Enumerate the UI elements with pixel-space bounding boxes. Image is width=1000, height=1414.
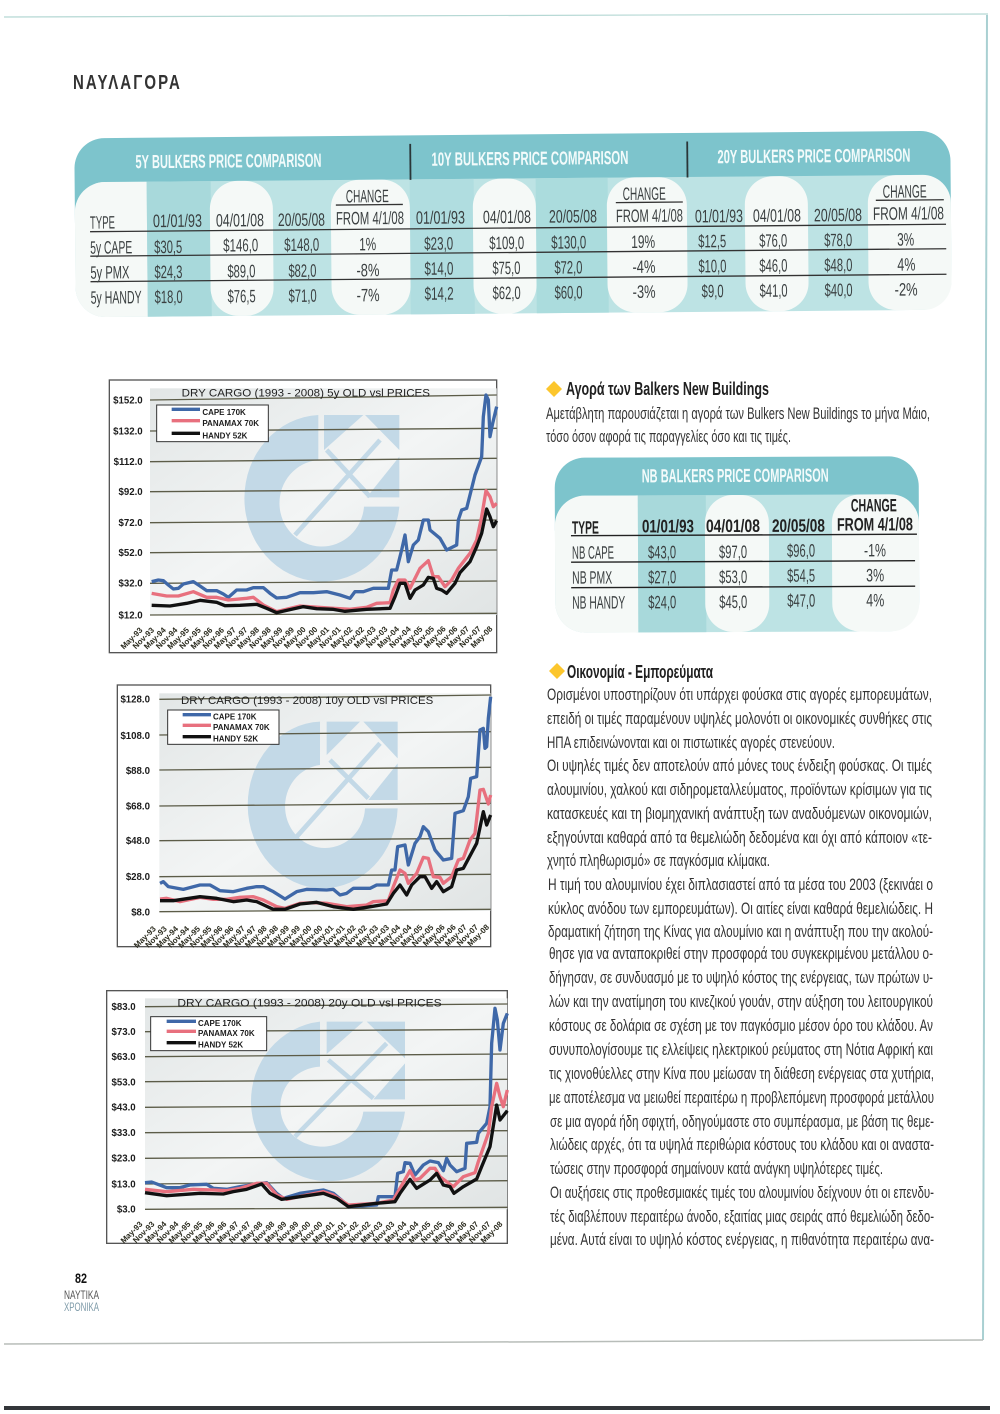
x axis labels: Nov-93	[131, 1219, 157, 1245]
x axis labels: Nov-98	[255, 923, 280, 949]
x axis labels: May-98	[243, 924, 269, 950]
table row 5y PMX: -8%	[356, 260, 379, 280]
table row 5y CAPE: $30,5	[154, 237, 182, 257]
gridlines	[150, 395, 497, 615]
table row 5y PMX: $75,0	[492, 258, 520, 278]
y axis labels: $132.0	[113, 426, 143, 437]
x axis labels: Nov-06	[434, 624, 460, 650]
x axis labels: May-00	[288, 923, 314, 949]
table rule lines	[90, 200, 946, 282]
legend: PANAMAX 70K	[213, 723, 270, 732]
NB table row pmx: $27,0	[648, 567, 676, 587]
x axis labels: May-06	[421, 922, 447, 948]
y axis labels: $108.0	[120, 731, 150, 742]
y axis labels: $12.0	[118, 610, 143, 621]
series: panamax	[145, 1083, 507, 1205]
gridlines	[159, 695, 491, 912]
x axis labels: May-97	[221, 924, 247, 950]
table column headings: 04/01/08	[483, 207, 531, 227]
x axis labels: Nov-03	[366, 923, 391, 948]
legend: PANAMAX 70K	[198, 1029, 255, 1038]
x axis labels: Nov-01	[322, 923, 347, 949]
heading: economy and commodities: Οικονομία - Εμπορεύματα	[567, 662, 713, 682]
y axis labels: $68.0	[126, 801, 150, 812]
y axis labels: $13.0	[111, 1179, 136, 1190]
footer: page number and magazine name	[64, 1270, 99, 1314]
x axis labels: Nov-07	[458, 624, 483, 650]
header titles and dividers: 5Y BULKERS PRICE COMPARISON	[135, 151, 322, 173]
x axis labels: May-03	[355, 923, 380, 949]
y axis labels: $8.0	[131, 907, 150, 918]
NB table row pmx: $54,5	[787, 566, 815, 586]
x axis labels: May-00	[282, 625, 308, 651]
NB table row pmx	[572, 565, 884, 588]
table row 5y PMX: $24,3	[154, 262, 183, 282]
y axis labels: $43.0	[111, 1103, 136, 1114]
watermark logo	[248, 722, 398, 888]
x axis labels: May-99	[266, 923, 291, 949]
table column headings: 04/01/08	[216, 210, 264, 231]
series: panamax	[160, 789, 491, 908]
table row 5y CAPE: 19%	[631, 232, 655, 252]
header titles and dividers	[135, 140, 911, 182]
y axis labels: $63.0	[111, 1052, 136, 1063]
y axis labels: $73.0	[111, 1027, 136, 1038]
NB table row handy	[572, 590, 884, 613]
x axis labels: May-94	[155, 924, 180, 950]
x axis labels: May-05	[399, 624, 425, 650]
NB table row cape: $97,0	[719, 542, 747, 562]
series: panamax	[152, 491, 497, 612]
NB table row pmx: NB PMX	[572, 568, 612, 588]
NB table title: NB BALKERS PRICE COMPARISON	[642, 466, 829, 487]
table column headings: 04/01/08	[753, 205, 801, 226]
x axis labels: Nov-94	[155, 1219, 181, 1245]
table row 5y HANDY: 5y HANDY	[91, 287, 142, 308]
NB table column headings: 01/01/93	[642, 516, 694, 536]
NB table body background	[555, 494, 919, 633]
x axis labels: Nov-99	[277, 923, 302, 949]
x axis labels: Nov-07	[455, 922, 480, 948]
legend: HANDY 52K	[213, 734, 258, 743]
NB table row cape: NB CAPE	[572, 543, 614, 563]
y axis labels: $48.0	[126, 836, 150, 847]
table column headings: 20/05/08	[549, 206, 597, 227]
legend: CAPE 170K	[198, 1019, 242, 1028]
x axis labels: May-96	[191, 1219, 217, 1245]
x axis labels: May-02	[335, 1219, 361, 1245]
x axis labels: May-08	[469, 624, 495, 650]
table column headings: CHANGE	[883, 181, 927, 202]
x axis labels: Nov-96	[210, 924, 236, 949]
series: cape	[152, 395, 497, 598]
legend	[168, 710, 279, 744]
x axis labels: Nov-95	[188, 924, 214, 950]
x axis labels: May-08	[466, 922, 491, 948]
table column headings: 01/01/93	[153, 211, 202, 231]
section title: ΝΑΥΛΑΓΟΡΑ	[73, 71, 182, 94]
table row 5y HANDY: $71,0	[289, 286, 317, 306]
x axis labels: Nov-95	[178, 625, 203, 651]
table row 5y HANDY: -3%	[633, 282, 656, 302]
x axis labels	[132, 922, 491, 950]
y axis labels: $33.0	[111, 1128, 136, 1139]
x axis labels: Nov-04	[388, 624, 413, 650]
table row 5y PMX: $10,0	[698, 256, 726, 276]
legend	[157, 405, 268, 442]
NB table rule lines	[571, 534, 917, 588]
legend: PANAMAX 70K	[202, 419, 259, 428]
heading: new buildings market: Αγορά των Balkers New Buildings	[566, 379, 769, 399]
table column headings: 20/05/08	[814, 205, 862, 225]
x axis labels: Nov-97	[224, 625, 250, 651]
NB table column headings: FROM 4/1/08	[837, 514, 913, 535]
table row 5y HANDY: $14,2	[425, 284, 454, 304]
table row 5y PMX: -4%	[632, 257, 655, 277]
chart title: DRY CARGO (1993 - 2008) 10y OLD vsl PRICES	[181, 695, 434, 707]
header titles and dividers: 10Y BULKERS PRICE COMPARISON	[431, 148, 629, 171]
table body background	[75, 175, 952, 317]
x axis labels: May-98	[236, 625, 261, 651]
x axis labels: Nov-04	[388, 923, 414, 948]
x axis labels: Nov-05	[419, 1219, 445, 1245]
x axis labels: May-94	[143, 1219, 169, 1245]
x axis labels: Nov-97	[233, 924, 258, 949]
x axis labels: May-07	[443, 922, 469, 948]
table column headings	[90, 181, 944, 233]
table column headings: CHANGE	[623, 184, 666, 204]
table row 5y PMX: $72,0	[554, 257, 582, 278]
y axis labels: $152.0	[113, 395, 143, 406]
table row 5y PMX	[90, 254, 915, 283]
x axis labels: Nov-06	[443, 1219, 469, 1245]
table column headings: TYPE	[90, 212, 115, 233]
y axis labels: $3.0	[117, 1205, 136, 1216]
table row 5y HANDY: $40,0	[825, 280, 853, 300]
table row 5y HANDY: -2%	[895, 279, 918, 300]
table row 5y HANDY: -7%	[357, 285, 380, 305]
x axis labels: May-97	[215, 1219, 241, 1245]
y axis labels: $112.0	[114, 457, 143, 468]
table row 5y CAPE: $23,0	[424, 234, 453, 254]
x axis labels: May-01	[310, 923, 336, 949]
gridlines	[145, 1004, 507, 1209]
y axis labels: $92.0	[118, 487, 143, 498]
NB table column headings: 20/05/08	[772, 516, 825, 536]
table row 5y HANDY: $9,0	[702, 281, 724, 301]
table row 5y HANDY: $41,0	[760, 281, 788, 301]
NB table row handy: $47,0	[787, 591, 815, 611]
table column headings: 01/01/93	[416, 207, 465, 228]
y axis labels: $88.0	[126, 766, 150, 777]
text block: economy and commodities	[547, 685, 934, 1249]
text block: new buildings market	[546, 404, 930, 446]
x axis labels: May-02	[332, 923, 358, 949]
x axis labels: Nov-00	[299, 1219, 325, 1245]
x axis labels: Nov-98	[248, 625, 273, 651]
NB table row cape	[572, 540, 886, 563]
x axis labels: Nov-02	[344, 923, 369, 949]
x axis labels: Nov-05	[410, 923, 436, 948]
x axis labels: May-08	[479, 1219, 505, 1245]
x axis labels: May-93	[132, 924, 158, 950]
y axis labels: $72.0	[118, 518, 143, 529]
table column headings: 20/05/08	[278, 210, 325, 230]
chart: dry cargo 10y old prices	[117, 685, 491, 950]
table row 5y HANDY: $60,0	[555, 282, 583, 303]
y axis labels: $128.0	[120, 695, 150, 706]
y axis labels: $52.0	[118, 548, 143, 559]
x axis labels: Nov-96	[203, 1219, 229, 1245]
x axis labels: May-96	[199, 924, 225, 950]
table row 5y PMX: $46,0	[759, 256, 787, 276]
x axis labels: Nov-02	[347, 1219, 373, 1245]
y axis labels: $32.0	[118, 579, 143, 590]
x axis labels: Nov-02	[341, 625, 366, 650]
table row 5y CAPE: 3%	[897, 230, 914, 250]
x axis labels: Nov-95	[179, 1219, 205, 1245]
y axis labels: $28.0	[126, 872, 150, 883]
NB table row pmx: $53,0	[719, 567, 747, 587]
x axis labels: Nov-00	[299, 923, 325, 949]
table row 5y CAPE: $148,0	[284, 235, 319, 255]
NB table row handy: $24,0	[648, 592, 676, 612]
x axis labels: Nov-07	[467, 1219, 493, 1245]
x axis labels: May-02	[329, 625, 355, 651]
NB table row pmx: 3%	[866, 565, 884, 585]
table row 5y HANDY: $76,5	[228, 286, 256, 306]
x axis labels: May-07	[455, 1219, 481, 1245]
legend: HANDY 52K	[202, 431, 248, 440]
x axis labels: Nov-96	[201, 625, 226, 651]
x axis labels: May-03	[359, 1219, 385, 1245]
NB table column headings: 04/01/08	[706, 516, 760, 536]
series: cape	[160, 697, 491, 899]
x axis labels: Nov-93	[144, 924, 169, 950]
table row 5y HANDY	[91, 279, 918, 308]
y axis labels	[113, 395, 143, 621]
x axis labels: Nov-06	[433, 922, 458, 948]
table column headings: 01/01/93	[695, 206, 743, 226]
legend: CAPE 170K	[213, 712, 257, 721]
table row 5y CAPE: 5y CAPE	[90, 237, 132, 258]
chart: dry cargo 20y old prices	[107, 991, 507, 1245]
table row 5y CAPE: $12,5	[698, 231, 726, 251]
watermark logo	[244, 415, 399, 582]
x axis labels	[119, 1219, 505, 1245]
table row 5y CAPE	[90, 230, 914, 258]
NB table row handy: 4%	[866, 590, 884, 610]
panel: bulkers price comparison table	[74, 131, 952, 317]
x axis labels: May-04	[376, 624, 401, 650]
chart title: DRY CARGO (1993 - 2008) 5y OLD vsl PRICES	[182, 388, 430, 400]
NB table column headings	[572, 495, 913, 538]
table header band	[74, 131, 951, 224]
y axis labels	[111, 1002, 136, 1216]
x axis labels: Nov-03	[371, 1219, 397, 1245]
x axis labels: Nov-03	[364, 624, 390, 650]
x axis labels: May-95	[167, 1219, 193, 1245]
legend: HANDY 52K	[198, 1041, 243, 1050]
x axis labels: Nov-97	[227, 1219, 253, 1245]
table row 5y CAPE: $146,0	[223, 235, 258, 256]
x axis labels: May-98	[239, 1219, 265, 1245]
NB table column headings: TYPE	[572, 518, 599, 538]
x axis labels: May-06	[431, 1219, 457, 1245]
NB table header band	[555, 456, 919, 531]
x axis labels: May-03	[352, 624, 378, 650]
series: cape	[145, 1008, 507, 1207]
text block: economy and commodities: χνητό πληθωρισμό» σε παγκόσμια κλίμακα.	[547, 851, 770, 870]
NB table row handy: NB HANDY	[572, 592, 625, 613]
table row 5y PMX: $89,0	[227, 261, 255, 281]
x axis labels: May-94	[142, 625, 168, 651]
table column headings: CHANGE	[346, 186, 389, 206]
x axis labels: May-99	[259, 625, 285, 651]
chart title: DRY CARGO (1993 - 2008) 20y OLD vsl PRICES	[177, 998, 442, 1010]
x axis labels: May-97	[212, 625, 238, 651]
series: handy	[160, 812, 491, 909]
x axis labels: May-01	[311, 1219, 337, 1245]
x axis labels: May-06	[422, 624, 448, 650]
text block: economy and commodities: ΗΠΑ επιδεινώνονται και οι πιστωτικές αγορές στενεύουν.	[547, 733, 835, 752]
watermark logo	[251, 1022, 405, 1181]
footer: page number and magazine name: ΧΡΟΝΙΚΑ	[64, 1300, 99, 1314]
x axis labels: Nov-98	[251, 1219, 277, 1245]
x axis labels: May-05	[407, 1219, 433, 1245]
legend	[151, 1017, 267, 1051]
icon: yellow diamond, new buildings heading	[546, 381, 562, 397]
table column headings: FROM 4/1/08	[616, 206, 683, 226]
icon: yellow diamond, economy heading	[549, 663, 565, 679]
table row 5y HANDY: $62,0	[493, 283, 521, 303]
series: handy	[152, 509, 497, 613]
table row 5y PMX: $48,0	[824, 255, 852, 275]
table row 5y CAPE: $109,0	[489, 233, 524, 253]
y axis labels: $23.0	[111, 1154, 136, 1165]
x axis labels: May-05	[399, 923, 425, 949]
x axis labels: Nov-01	[323, 1219, 349, 1245]
legend: CAPE 170K	[202, 408, 246, 417]
table row 5y CAPE: $130,0	[551, 232, 586, 253]
x axis labels: May-04	[377, 923, 402, 949]
x axis labels: May-93	[119, 625, 145, 651]
x axis labels: Nov-99	[275, 1219, 301, 1245]
table column headings: FROM 4/1/08	[873, 203, 944, 224]
footer: page number and magazine name: 82	[75, 1270, 87, 1286]
y axis labels: $53.0	[111, 1077, 136, 1088]
x axis labels: Nov-99	[271, 625, 296, 651]
x axis labels: Nov-94	[154, 625, 180, 651]
x axis labels: May-01	[306, 625, 331, 651]
y axis labels: $83.0	[111, 1002, 136, 1013]
x axis labels: Nov-01	[318, 625, 343, 650]
x axis labels: May-93	[119, 1219, 145, 1245]
x axis labels: May-04	[383, 1219, 409, 1245]
x axis labels: May-96	[189, 625, 215, 651]
NB table row handy: $45,0	[719, 592, 747, 612]
x axis labels: May-00	[287, 1219, 313, 1245]
chart: dry cargo 5y old prices	[109, 380, 497, 653]
x axis labels: May-07	[446, 624, 471, 650]
NB table row cape: -1%	[864, 540, 886, 560]
x axis labels	[119, 624, 495, 651]
x axis labels: Nov-94	[166, 924, 191, 950]
x axis labels: Nov-00	[294, 625, 320, 650]
table row 5y PMX: 4%	[897, 254, 915, 275]
y axis labels	[120, 695, 150, 918]
table row 5y HANDY: $18,0	[155, 287, 183, 307]
x axis labels: Nov-04	[395, 1219, 421, 1245]
NB table column headings: CHANGE	[851, 495, 897, 516]
panel: NB balkers price comparison table	[555, 456, 919, 633]
footer: page number and magazine name: ΝΑΥΤΙΚΑ	[64, 1288, 99, 1302]
x axis labels: May-95	[166, 625, 191, 651]
x axis labels: May-95	[177, 924, 202, 950]
text block: new buildings market: τόσο όσον αφορά τις παραγγελίες όσο και τις τιμές.	[546, 427, 791, 446]
table row 5y CAPE: $78,0	[824, 230, 852, 250]
table column headings: FROM 4/1/08	[336, 208, 404, 229]
NB table row cape: $96,0	[787, 541, 815, 561]
table row 5y CAPE: 1%	[359, 234, 376, 254]
table row 5y PMX: 5y PMX	[90, 262, 130, 283]
x axis labels: Nov-93	[131, 625, 156, 651]
table row 5y PMX: $14,0	[424, 259, 453, 279]
table row 5y CAPE: $76,0	[759, 231, 787, 251]
x axis labels: May-99	[263, 1219, 289, 1245]
table row 5y PMX: $82,0	[288, 261, 316, 281]
x axis labels: Nov-05	[411, 624, 436, 650]
NB table row cape: $43,0	[648, 542, 676, 562]
series: handy	[145, 1105, 507, 1207]
